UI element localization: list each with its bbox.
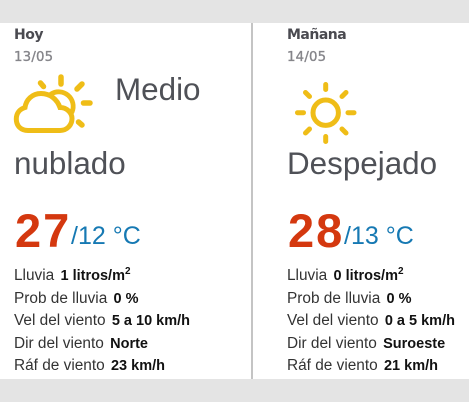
divider between days <box>251 23 253 379</box>
icon: sun <box>295 82 356 144</box>
weather details: Ráf de viento 23 km/h <box>14 357 165 374</box>
weather details: Prob de lluvia 0 % <box>14 290 139 306</box>
weather details: Ráf de viento 21 km/h <box>287 357 438 374</box>
date: today: 13/05 <box>14 50 53 65</box>
panel: tomorrow <box>287 27 455 374</box>
date: tomorrow: 14/05 <box>287 50 326 65</box>
weather details: Dir del viento Norte <box>14 334 148 352</box>
weather details <box>14 266 190 374</box>
panel: today <box>14 27 200 374</box>
minimum temperature: /13 °C <box>344 222 414 250</box>
minimum temperature: /12 °C <box>71 222 141 250</box>
weather details: Vel del viento 0 a 5 km/h <box>287 312 455 329</box>
heading: tomorrow: Mañana <box>287 27 346 43</box>
condition text: Medio nublado: Medio <box>115 72 200 107</box>
panel: today: nublado <box>14 146 126 181</box>
condition text: Despejado: Despejado <box>287 146 437 181</box>
weather details: Dir del viento Suroeste <box>287 334 445 352</box>
icon: sun behind cloud <box>14 74 93 133</box>
weather details: Lluvia 1 litros/m2 <box>14 266 131 284</box>
maximum temperature: 27 <box>15 204 71 257</box>
weather details: Prob de lluvia 0 % <box>287 290 412 306</box>
heading: today: Hoy <box>14 27 43 43</box>
weather details: Lluvia 0 litros/m2 <box>287 266 404 284</box>
weather details <box>287 266 455 374</box>
weather details: Vel del viento 5 a 10 km/h <box>14 312 190 329</box>
maximum temperature: 28 <box>288 204 344 257</box>
